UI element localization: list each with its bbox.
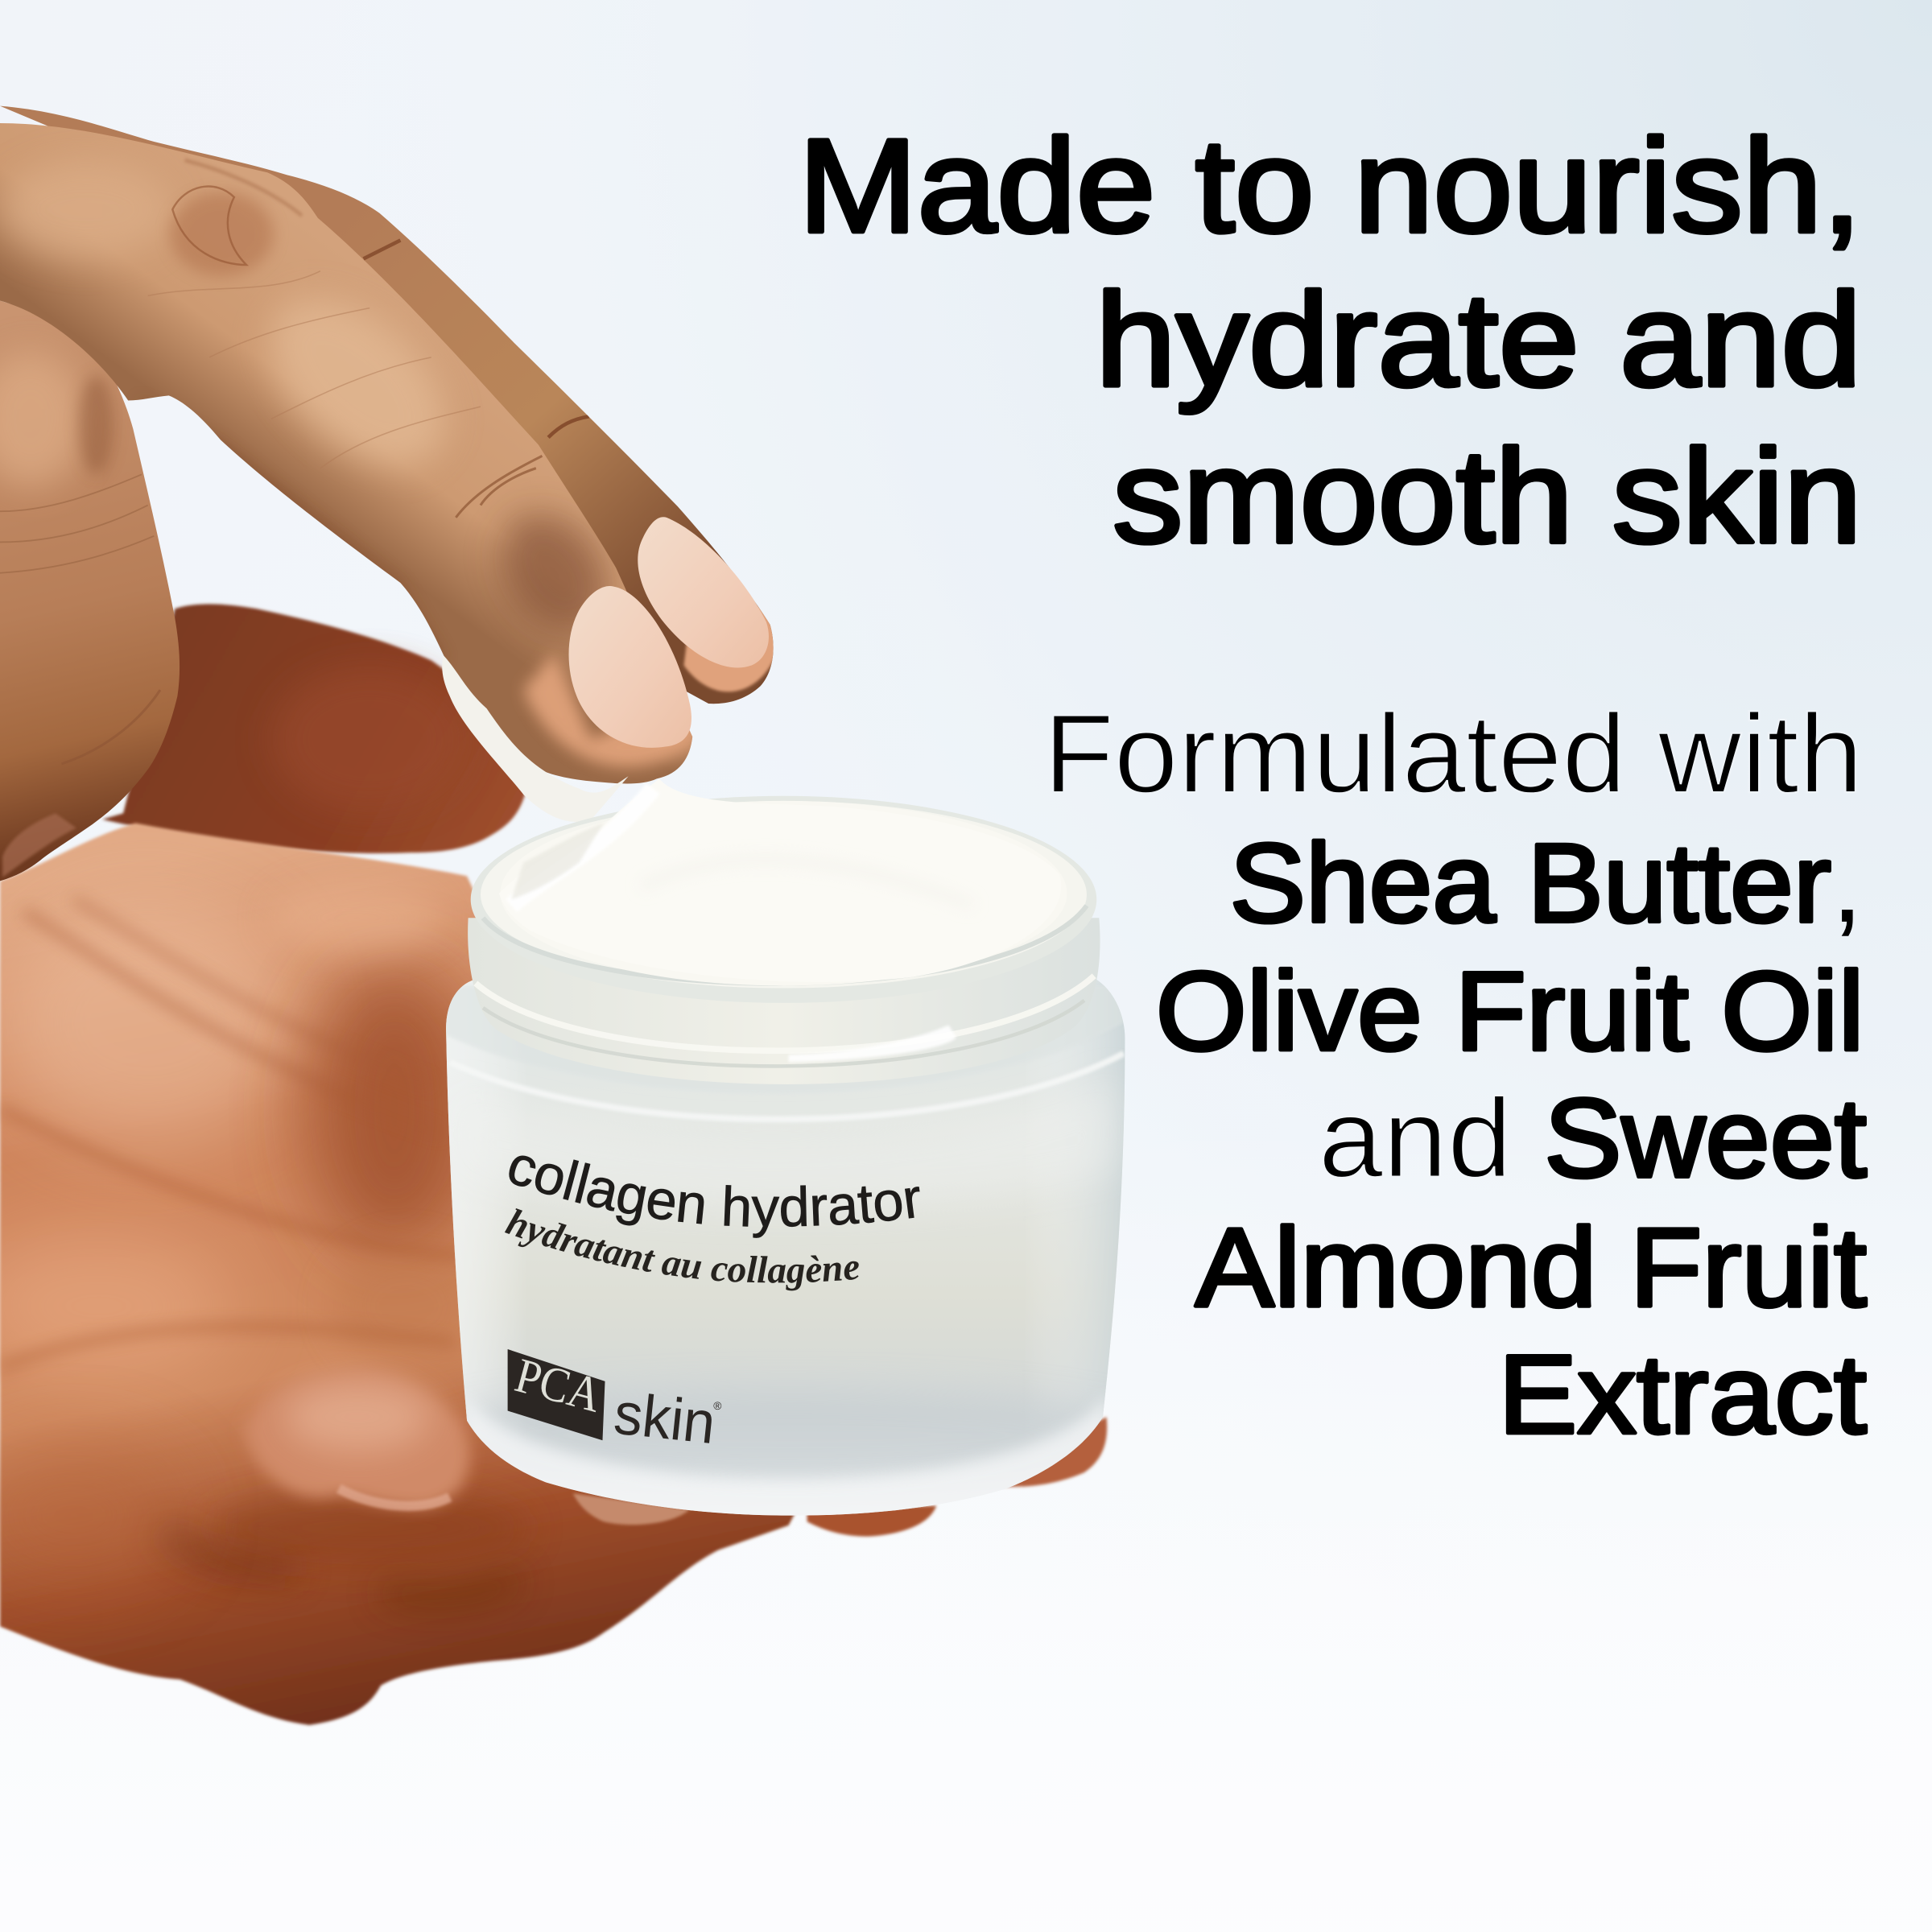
ingredients text block: Formulated with [1043, 691, 1863, 816]
nail back [638, 517, 769, 667]
back pointing finger [0, 106, 778, 704]
front pointing finger [0, 123, 702, 783]
thumb [244, 1370, 470, 1508]
jar rim [471, 796, 1096, 1003]
heading [799, 112, 1862, 571]
nail front [569, 586, 691, 748]
fingertips under jar [573, 1417, 1107, 1537]
heading: hydrate and [1096, 266, 1862, 415]
jar body [446, 980, 1125, 1516]
logo: PCA skin: PCA [510, 1348, 607, 1423]
hand holding jar [0, 106, 1107, 1725]
logo: PCA skin [508, 1348, 721, 1456]
heading: Made to nourish, [799, 112, 1862, 261]
cream jar [446, 779, 1125, 1516]
ingredients text block: Shea Butter, [1230, 820, 1863, 946]
ingredients text block [1043, 691, 1867, 1457]
blurred finger behind [102, 604, 526, 853]
threaded neck [468, 918, 1100, 1084]
logo: PCA skin: skin [611, 1379, 719, 1456]
ingredients text block: Almond Fruit [1195, 1204, 1867, 1330]
palm [0, 823, 813, 1725]
logo: PCA skin: ® [713, 1400, 721, 1412]
cream surface [499, 778, 1067, 985]
ingredients text block: and Sweet [1319, 1075, 1867, 1201]
heading: smooth skin [1113, 422, 1862, 571]
ingredients text block: Olive Fruit Oil [1156, 948, 1864, 1074]
label: product name: collagen hydrator [509, 1156, 919, 1238]
label: French name: hydratant au collagène [504, 1208, 859, 1291]
folded finger [0, 300, 180, 881]
ingredients text block: Extract [1498, 1331, 1867, 1457]
cream on finger [442, 655, 629, 822]
